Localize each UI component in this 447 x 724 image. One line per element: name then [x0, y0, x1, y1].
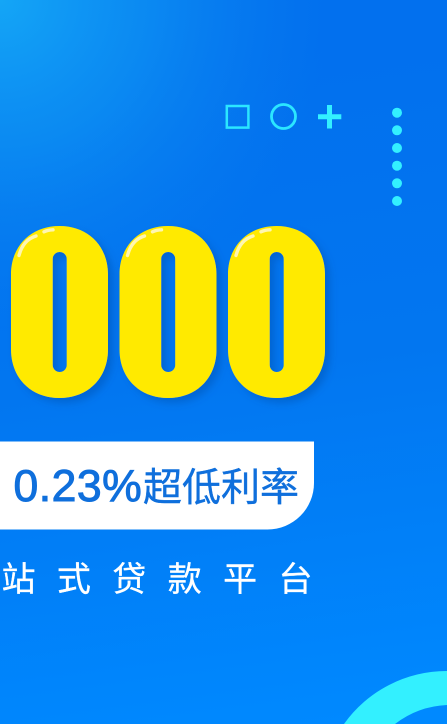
zero 1	[11, 226, 108, 398]
rate text: 0.23%	[14, 462, 142, 511]
background glow	[0, 0, 447, 400]
subtitle: 站式贷款平台	[2, 561, 334, 599]
zero 2	[120, 226, 216, 398]
icon: plus	[318, 105, 341, 128]
zero 3	[228, 226, 325, 398]
white rate banner	[0, 442, 314, 530]
icon: circle outline	[272, 104, 296, 128]
rate text: 超低利率	[143, 467, 299, 510]
icon: square outline	[227, 106, 248, 128]
dotted column	[392, 108, 402, 206]
big yellow zeros	[11, 226, 325, 398]
decorative ring	[344, 671, 447, 724]
